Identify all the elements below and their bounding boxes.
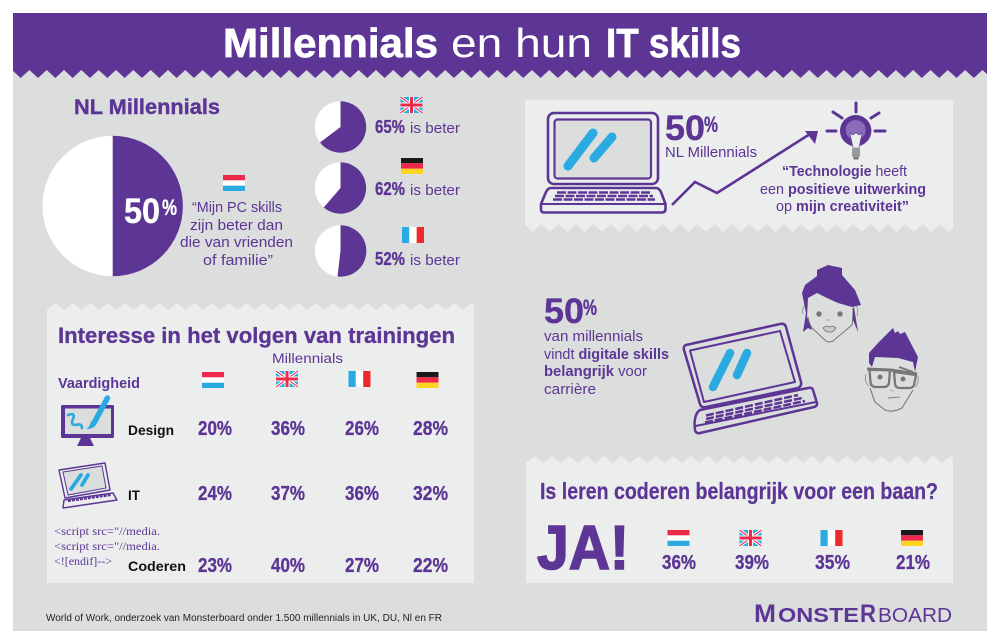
row: coderen: 23% <box>198 555 232 577</box>
stat: 50 percent: % <box>704 112 718 137</box>
row: design: Design <box>128 422 174 438</box>
panel: NL millennials pie <box>42 96 293 276</box>
header banner: Millennials <box>223 20 438 66</box>
panel: NL millennials pie: zijn beter dan <box>190 218 283 234</box>
stat: 50 percent: % <box>583 295 597 320</box>
row: design: 28% <box>413 418 448 440</box>
panel: NL millennials pie: die van vrienden <box>180 235 293 251</box>
panel: other countries pies: 52% <box>375 248 405 269</box>
stat: 50 percent: NL Millennials <box>665 145 757 161</box>
row: coderen: <script src="//media. <box>54 539 160 553</box>
header banner: en hun <box>451 20 592 66</box>
stat: 50 percent: 50 <box>665 109 705 148</box>
flags and values: 35% <box>815 552 850 574</box>
panel: other countries pies <box>315 97 460 277</box>
row: IT: 37% <box>271 483 305 505</box>
panel: digital skills and career <box>544 265 918 433</box>
logo: Monsterboard: ONSTE <box>778 605 859 627</box>
row: IT <box>59 463 448 508</box>
row: coderen: 40% <box>271 555 305 577</box>
panel: training interest table <box>47 303 474 583</box>
row: design: 20% <box>198 418 232 440</box>
row: coderen: Coderen <box>128 558 186 574</box>
column label: Vaardigheid <box>58 376 140 392</box>
row: design: 36% <box>271 418 305 440</box>
text: digital skills <box>544 329 669 398</box>
row: IT: IT <box>128 487 140 503</box>
panel: technology and creativity <box>525 100 953 232</box>
logo: Monsterboard: M <box>754 600 776 628</box>
row: coderen: <![endif]--> <box>54 554 112 568</box>
header banner: IT skills <box>606 20 741 66</box>
row: IT: 32% <box>413 483 448 505</box>
row: coderen <box>54 524 448 577</box>
panel: NL millennials pie: 50 <box>124 192 160 231</box>
logo: Monsterboard: BOARD <box>878 604 952 627</box>
icon: light bulb <box>827 103 885 160</box>
flags and values: 36% <box>662 552 696 574</box>
heading: coding question: Is leren coderen belangrijk voor een baan? <box>540 478 938 504</box>
icon: woman face <box>802 265 861 342</box>
flags and values <box>662 530 930 574</box>
footnote source: World of Work, onderzoek van Monsterboard onder 1.500 millennials in UK, DU, Nl en FR <box>46 613 442 624</box>
flags and values: 21% <box>896 552 930 574</box>
panel: other countries pies: 62% <box>375 178 405 199</box>
icon: laptop <box>541 113 666 212</box>
icon: man face with glasses <box>865 328 918 411</box>
text: digital skills: vindt digitale skills <box>544 347 669 363</box>
quote: technology <box>760 164 926 215</box>
row: coderen: 22% <box>413 555 448 577</box>
row: IT: 36% <box>345 483 379 505</box>
flags row <box>202 371 438 388</box>
text: digital skills: van millennials <box>544 329 643 345</box>
quote: technology: op mijn creativiteit” <box>776 199 909 215</box>
text: digital skills: carrière <box>544 382 596 398</box>
row: design <box>61 398 448 446</box>
subheading: Millennials <box>272 351 343 366</box>
icon: tilted laptop <box>684 324 817 433</box>
logo: Monsterboard: R <box>860 600 876 628</box>
panel: NL millennials pie: % <box>162 195 177 220</box>
panel: NL millennials pie: “Mijn PC skills <box>192 200 282 216</box>
quote: technology: “Technologie heeft <box>782 164 907 180</box>
panel: NL millennials pie: of familie” <box>203 253 273 269</box>
stat: 50 percent <box>665 109 757 161</box>
quote: technology: een positieve uitwerking <box>760 182 926 198</box>
row: coderen: <script src="//media. <box>54 524 160 538</box>
text: digital skills: belangrijk voor <box>544 364 647 380</box>
logo: Monsterboard <box>754 600 952 628</box>
row: design: 26% <box>345 418 379 440</box>
row: IT: 24% <box>198 483 232 505</box>
panel: NL millennials pie: NL Millennials <box>74 96 220 119</box>
panel: other countries pies: is beter <box>410 120 460 137</box>
callout: JA: JA! <box>537 514 629 583</box>
header banner <box>13 13 987 78</box>
heading: training: Interesse in het volgen van trainingen <box>58 323 455 348</box>
panel: other countries pies: is beter <box>410 252 460 269</box>
row: coderen: 27% <box>345 555 379 577</box>
panel: other countries pies: 65% <box>375 116 405 137</box>
panel: learning to code <box>526 456 953 583</box>
stat: 50 percent: 50 <box>544 292 584 331</box>
arrow: rising trend <box>672 131 818 205</box>
flags and values: 39% <box>735 552 769 574</box>
panel: other countries pies: is beter <box>410 182 460 199</box>
